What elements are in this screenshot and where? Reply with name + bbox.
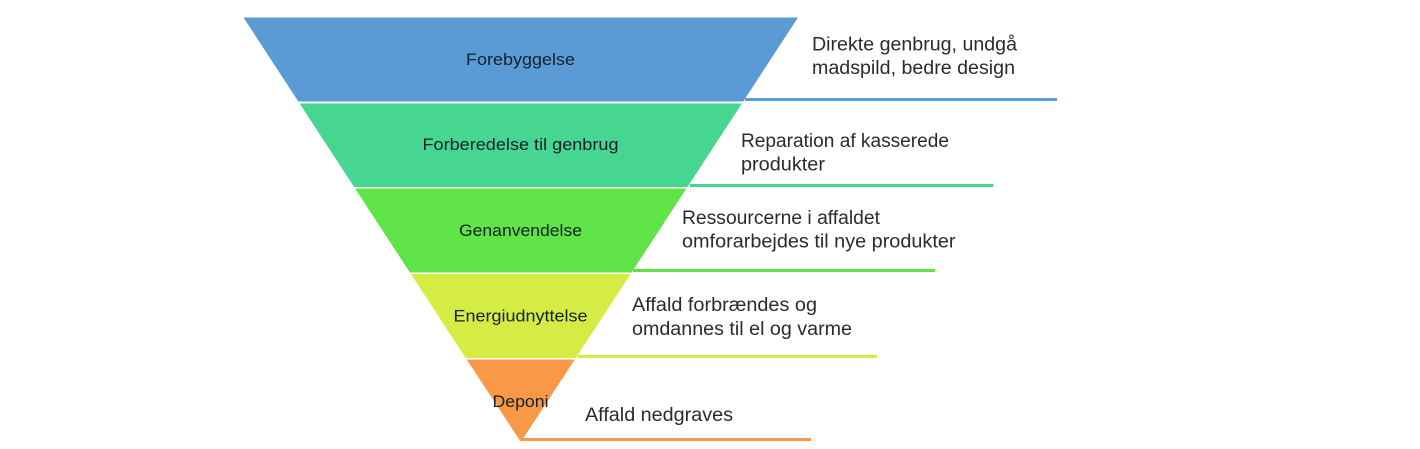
level: Genanvendelse [355,188,956,272]
label: Genanvendelse: Genanvendelse [459,221,582,240]
funnel band: Forebyggelse [244,18,798,102]
leader line: teal green [690,184,994,187]
description: Forberedelse til genbrug: Reparation af kasserede [741,131,949,152]
leader line: blue [745,98,1057,101]
funnel band: Deponi [467,360,575,442]
leader line: lime [578,355,877,358]
level: Forberedelse til genbrug [300,104,994,187]
funnel band: Forberedelse til genbrug [300,104,742,187]
leader line: orange [522,438,811,441]
level: Deponi [467,360,811,442]
leader line: green [633,269,935,272]
level: Forebyggelse [244,18,1057,102]
description: Forberedelse til genbrug: produkter [741,154,826,176]
funnel band: Genanvendelse [355,188,686,272]
description: Genanvendelse: Ressourcerne i affaldet [682,208,881,229]
description: Energiudnyttelse: Affald forbrændes og [632,295,817,316]
description: Forebyggelse: Direkte genbrug, undgå [812,34,1017,56]
description: Forebyggelse: madspild, bedre design [812,58,1015,79]
description: Genanvendelse: omforarbejdes til nye produkter [682,232,956,252]
label: Forberedelse til genbrug: Forberedelse til genbrug [422,135,618,154]
label: Deponi: Deponi [492,392,548,411]
label: Forebyggelse: Forebyggelse [466,50,575,69]
funnel band: Energiudnyttelse [411,274,631,358]
description: Deponi: Affald nedgraves [585,405,733,426]
label: Energiudnyttelse: Energiudnyttelse [454,306,588,326]
description: Energiudnyttelse: omdannes til el og varme [632,319,852,340]
level: Energiudnyttelse [411,274,877,358]
